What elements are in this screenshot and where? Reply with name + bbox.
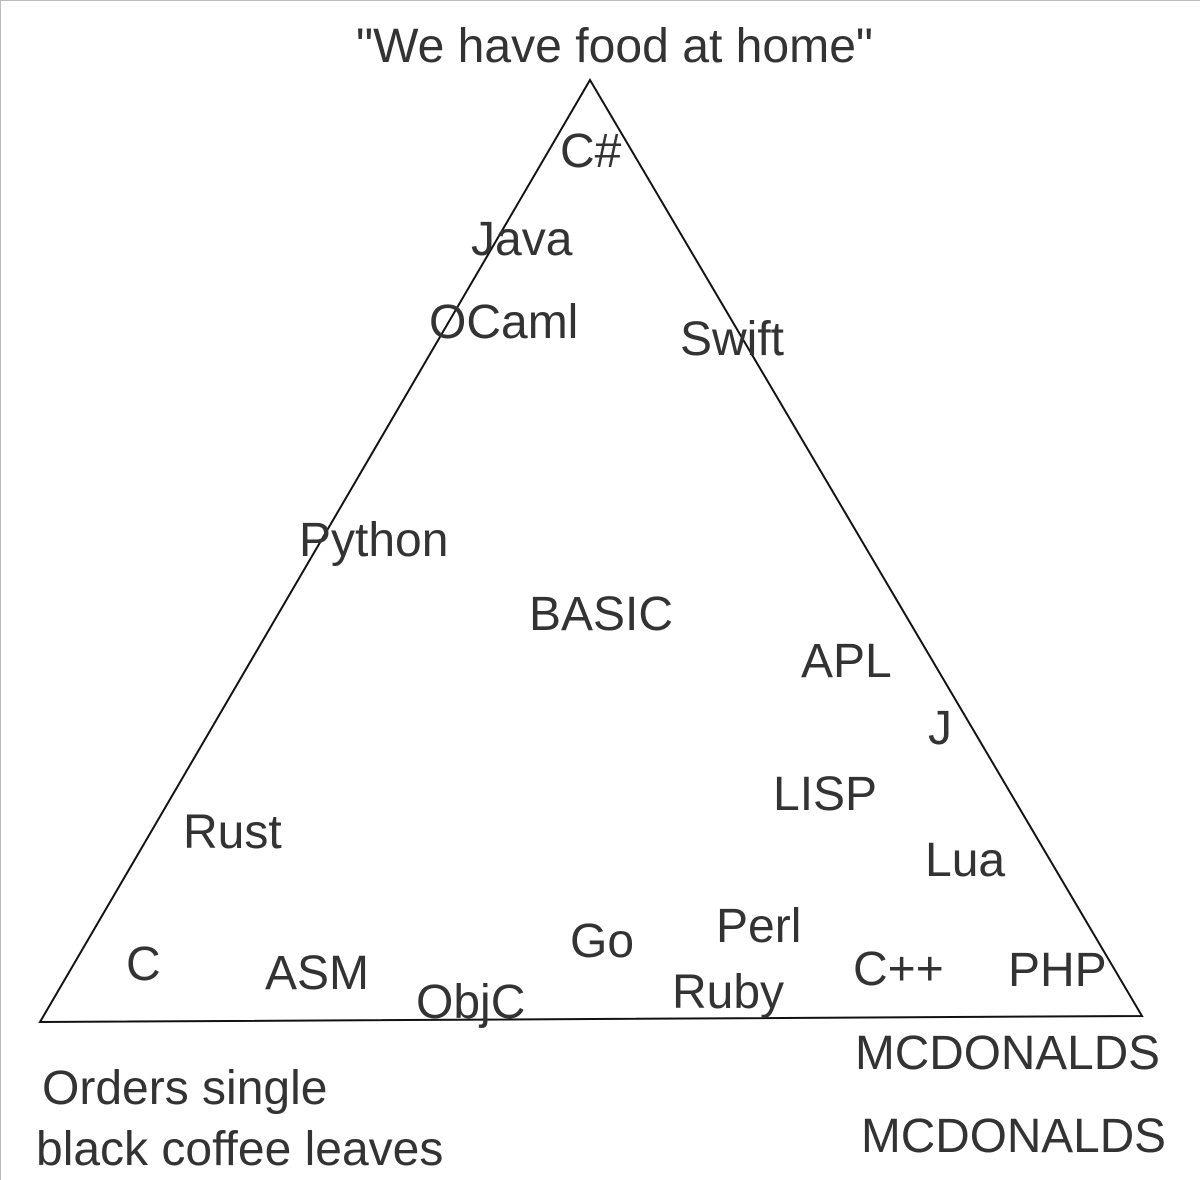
label: PHP: PHP — [1008, 944, 1107, 997]
label: ObjC: ObjC — [416, 976, 525, 1029]
label: Java: Java — [471, 213, 573, 266]
triangle — [40, 80, 1142, 1022]
label: BASIC: BASIC — [529, 588, 673, 641]
label: Rust: Rust — [183, 806, 282, 859]
label: Python: Python — [299, 514, 448, 567]
bottom left corner label: second line: black coffee leaves — [36, 1123, 443, 1176]
bottom left corner label: first line: Orders single — [42, 1062, 327, 1115]
label: Go: Go — [570, 915, 634, 968]
label: C: C — [126, 938, 161, 991]
label: C#: C# — [560, 125, 622, 178]
bottom right corner label: first line: MCDONALDS — [855, 1027, 1160, 1080]
label: J: J — [928, 702, 952, 755]
label: Swift: Swift — [680, 313, 784, 366]
label: Lua: Lua — [925, 834, 1005, 887]
label: Ruby: Ruby — [672, 966, 784, 1019]
label: ASM: ASM — [265, 947, 369, 1000]
label: APL: APL — [801, 635, 892, 688]
bottom right corner label: second line: MCDONALDS — [861, 1110, 1166, 1163]
title: top corner label: "We have food at home" — [356, 20, 873, 73]
label: LISP: LISP — [773, 768, 877, 821]
label: OCaml: OCaml — [429, 296, 578, 349]
label: C++: C++ — [853, 943, 944, 996]
label: Perl: Perl — [716, 900, 801, 953]
